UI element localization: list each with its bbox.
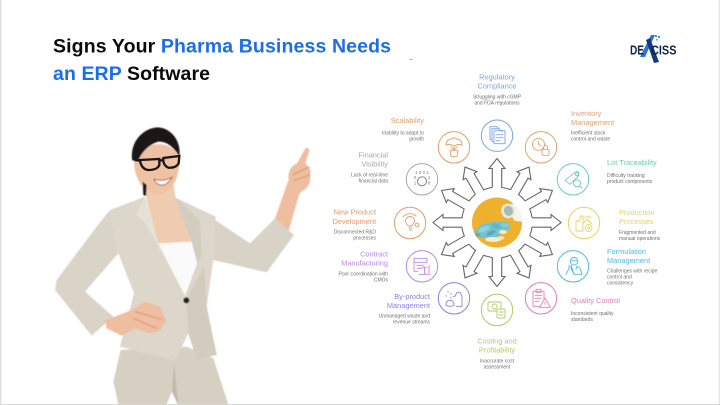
lapels and shadows [136, 197, 185, 296]
panel: New Product Development: processes [353, 236, 376, 242]
panel: Formulation Management [557, 247, 658, 287]
icon: binary data [414, 170, 431, 186]
panel: Scalability [382, 116, 470, 163]
left sleeve [55, 210, 118, 336]
icon: tag and magnifier [565, 171, 582, 188]
panel: Quality Control: Inconsistent quality [571, 311, 614, 317]
panel: Formulation Management: control and [607, 275, 632, 281]
panel: Costing and Profitability: Costing and [477, 337, 517, 346]
panel: Quality Control: standards [571, 317, 593, 323]
panel: Production Processes: Production [619, 208, 654, 217]
face [134, 144, 179, 194]
panel: New Product Development: Development [332, 217, 376, 226]
panel: Scalability: Scalability [391, 116, 424, 125]
panel: Costing and Profitability: Inaccurate cost [480, 359, 515, 365]
panel: Quality Control [525, 283, 620, 323]
panel: Production Processes: manual operations [619, 236, 661, 242]
panel: By-product Management [379, 283, 470, 326]
panel: Formulation Management: Management [607, 256, 650, 265]
panel: Lot Traceability: Lot Traceability [607, 158, 657, 167]
panel: Contract Manufacturing: CMOs [374, 278, 388, 284]
panel: Financial Visibility [351, 151, 438, 195]
panel: Regulatory Compliance: and FDA regulations [474, 101, 520, 107]
title [53, 36, 391, 85]
icon: clock and lock [532, 138, 549, 155]
icon: binary data: 0 [428, 180, 431, 185]
panel: Production Processes: Processes [619, 217, 654, 226]
panel: By-product Management: revenue streams [393, 320, 430, 326]
icon: binary data: 0 [414, 175, 417, 180]
panel: New Product Development [332, 207, 426, 242]
panel: Inventory Management: Inefficient stock [571, 131, 606, 137]
icon: bottle and waste [446, 291, 462, 306]
panel: Inventory Management: Management [571, 118, 614, 127]
white top [158, 242, 197, 296]
panel: Contract Manufacturing [339, 250, 438, 284]
panel: Financial Visibility: financial data [359, 179, 388, 185]
icon: plant in pot [446, 138, 462, 156]
panel: Quality Control: Quality Control [571, 296, 620, 305]
panel: Production Processes [568, 207, 661, 242]
icon: clipboard and warning [533, 289, 550, 307]
neck and chest [145, 183, 193, 244]
trousers [113, 347, 228, 404]
panel: By-product Management: Unmanaged waste and [379, 314, 430, 320]
icon: binary data: 1 [414, 180, 417, 185]
raised forearm and hand [275, 147, 311, 231]
smile [154, 177, 172, 185]
panel: By-product Management: Management [387, 301, 430, 310]
title: Signs Your Pharma Business Needs [53, 36, 391, 58]
logo: Dexciss [630, 35, 676, 63]
panel: Scalability: Inability to adapt to [382, 130, 424, 136]
panel: Contract Manufacturing: Contract [360, 250, 388, 259]
logo: Dexciss: CISS [651, 44, 676, 58]
panel: Costing and Profitability: assessment [484, 365, 511, 371]
panel: Lot Traceability: product components [607, 179, 653, 185]
right sleeve [213, 218, 294, 272]
panel: Contract Manufacturing: Poor coordination with [339, 272, 388, 278]
panel: Scalability: growth [409, 136, 424, 142]
panel: Formulation Management: Challenges with recipe [607, 269, 658, 275]
icon: scientist with flask [566, 258, 582, 274]
panel: Regulatory Compliance: Regulatory [479, 72, 515, 82]
panel: Regulatory Compliance: Compliance [477, 82, 517, 91]
panel: Regulatory Compliance [473, 72, 522, 151]
icon: binary data: 1 0 0 1 [415, 170, 429, 175]
person pointing upward [55, 127, 311, 404]
panel: Inventory Management [525, 109, 614, 163]
panel: Regulatory Compliance: Struggling with cGMP [473, 95, 522, 101]
panel: Lot Traceability: Difficulty tracking [607, 173, 645, 179]
glasses [135, 156, 179, 170]
icon: documents [490, 127, 505, 144]
panel: Costing and Profitability: Profitability [479, 346, 515, 355]
icon: signed contract [414, 258, 430, 274]
panel: Contract Manufacturing: Manufacturing [341, 259, 388, 268]
panel: New Product Development: New Product [334, 208, 376, 217]
icon: factory and gear [576, 216, 592, 232]
title: an ERP Software [53, 63, 210, 85]
panel: By-product Management: By-product [394, 292, 430, 301]
panel: Inventory Management: control and waste [571, 137, 610, 143]
jacket [110, 197, 217, 361]
panel: Financial Visibility: Visibility [361, 160, 388, 169]
icon: banknote and calculator [488, 302, 505, 318]
panel: Financial Visibility: Financial [358, 151, 388, 160]
panel: Financial Visibility: Lack of real-time [351, 173, 388, 179]
panel: Costing and Profitability [477, 294, 517, 371]
diagram labels and icon circles [332, 72, 661, 371]
icon: binary data: 1 [428, 175, 431, 180]
hand on hip [105, 302, 166, 336]
panel: Production Processes: Fragmented and [619, 230, 656, 236]
panel: Lot Traceability [557, 158, 657, 195]
panel: Formulation Management: consistency [607, 281, 634, 287]
radial arrows around centre image [433, 158, 561, 286]
hair [132, 127, 180, 161]
panel: Formulation Management: Formulation [607, 247, 646, 256]
panel: Inventory Management: Inventory [571, 109, 602, 118]
panel: New Product Development: Disconnected R&D [334, 230, 376, 236]
centre image: spilled pills [472, 198, 522, 248]
logo: Dexciss: DE [630, 44, 644, 58]
icon: light bulb [403, 214, 419, 230]
